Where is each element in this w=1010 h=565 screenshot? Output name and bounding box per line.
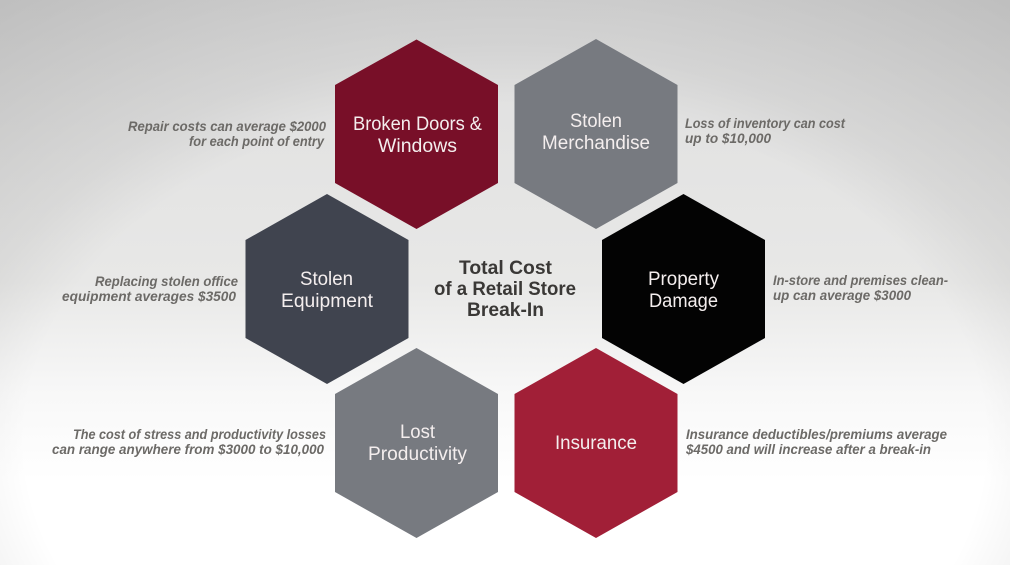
hexagon: Property Damage [602, 194, 765, 384]
hexagon: Stolen Merchandise: Stolen [570, 111, 622, 132]
text: stolen merchandise cost: up to $10,000 [685, 130, 771, 146]
hexagon: Stolen Equipment: Equipment [281, 291, 374, 312]
text: lost productivity cost: The cost of stress and productivity losses [73, 426, 326, 442]
hexagon: Property Damage: Damage [649, 291, 718, 312]
text: stolen merchandise cost: Loss of inventory can cost [685, 115, 846, 131]
hexagon: Stolen Equipment [246, 194, 408, 384]
text: stolen equipment cost [62, 273, 238, 304]
text: property damage cost [773, 272, 948, 303]
text: broken doors cost: for each point of entry [189, 133, 325, 149]
text: broken doors cost [128, 118, 326, 149]
title: Total Cost [459, 258, 553, 279]
title [434, 258, 576, 321]
hexagon: Insurance: Insurance [555, 433, 637, 454]
text: lost productivity cost: can range anywhere from $3000 to $10,000 [52, 441, 324, 457]
hexagon: Insurance [514, 348, 678, 538]
hexagon: Property Damage: Property [648, 269, 719, 290]
hexagon: Stolen Merchandise: Merchandise [542, 133, 650, 154]
hexagon: Lost Productivity: Lost [400, 422, 436, 443]
text: property damage cost: up can average $3000 [773, 287, 911, 303]
title: of a Retail Store [434, 279, 576, 300]
text: stolen equipment cost: equipment averages $3500 [62, 288, 236, 304]
text: property damage cost: In-store and premises clean- [773, 272, 948, 288]
text: lost productivity cost [52, 426, 326, 457]
hexagon: Lost Productivity [335, 348, 498, 538]
text: insurance cost: $4500 and will increase after a break-in [685, 441, 931, 457]
text: insurance cost [685, 426, 947, 457]
text: insurance cost: Insurance deductibles/premiums average [686, 426, 947, 442]
hexagon: Broken Doors & Windows: Windows [378, 136, 457, 157]
title: Break-In [467, 300, 544, 321]
text: stolen equipment cost: Replacing stolen office [95, 273, 238, 289]
hexagon: Lost Productivity: Productivity [368, 444, 468, 465]
hexagon: Stolen Equipment: Stolen [300, 269, 353, 290]
hexagon: Broken Doors & Windows: Broken Doors & [353, 114, 482, 135]
text: stolen merchandise cost [685, 115, 846, 146]
text: broken doors cost: Repair costs can average $2000 [128, 118, 326, 134]
hexagon: Broken Doors & Windows [335, 40, 498, 229]
hexagon: Stolen Merchandise [514, 39, 678, 229]
